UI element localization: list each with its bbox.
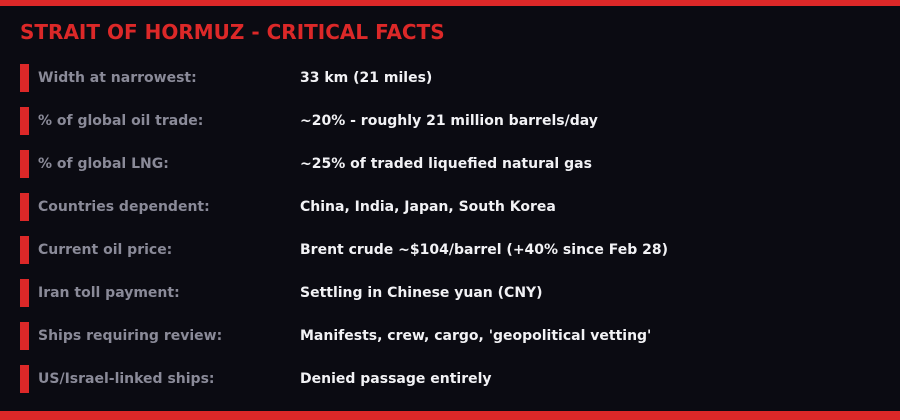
- row: review: Manifests, crew, cargo, 'geopolitical vetting': [300, 328, 651, 344]
- row: denied: US/Israel-linked ships:: [38, 371, 215, 387]
- row: oil trade: [20, 107, 598, 135]
- row: LNG: % of global LNG:: [38, 156, 169, 172]
- row: LNG: [20, 150, 592, 178]
- top bar: [0, 0, 900, 6]
- row: countries: Countries dependent:: [38, 199, 210, 215]
- row: toll: Settling in Chinese yuan (CNY): [300, 285, 543, 301]
- row: review: Ships requiring review:: [38, 328, 222, 344]
- row: toll: [20, 279, 543, 307]
- bottom bar: [0, 411, 900, 420]
- row: oil price: [20, 236, 668, 264]
- row: countries: China, India, Japan, South Korea: [300, 199, 556, 215]
- row: denied: Denied passage entirely: [300, 371, 492, 387]
- row: width: Width at narrowest:: [38, 70, 197, 86]
- row: oil price: Brent crude ~$104/barrel (+40% since Feb 28): [300, 242, 668, 258]
- row: oil trade: ~20% - roughly 21 million barrels/day: [300, 113, 598, 129]
- row: width: 33 km (21 miles): [300, 70, 432, 86]
- title: STRAIT OF HORMUZ - CRITICAL FACTS: [20, 20, 445, 44]
- row: oil trade: % of global oil trade:: [38, 113, 203, 129]
- row: review: [20, 322, 651, 350]
- row: width: [20, 64, 432, 92]
- row: countries: [20, 193, 556, 221]
- row: toll: Iran toll payment:: [38, 285, 180, 301]
- row: oil price: Current oil price:: [38, 242, 172, 258]
- row: LNG: ~25% of traded liquefied natural gas: [300, 156, 592, 172]
- row: denied: [20, 365, 492, 393]
